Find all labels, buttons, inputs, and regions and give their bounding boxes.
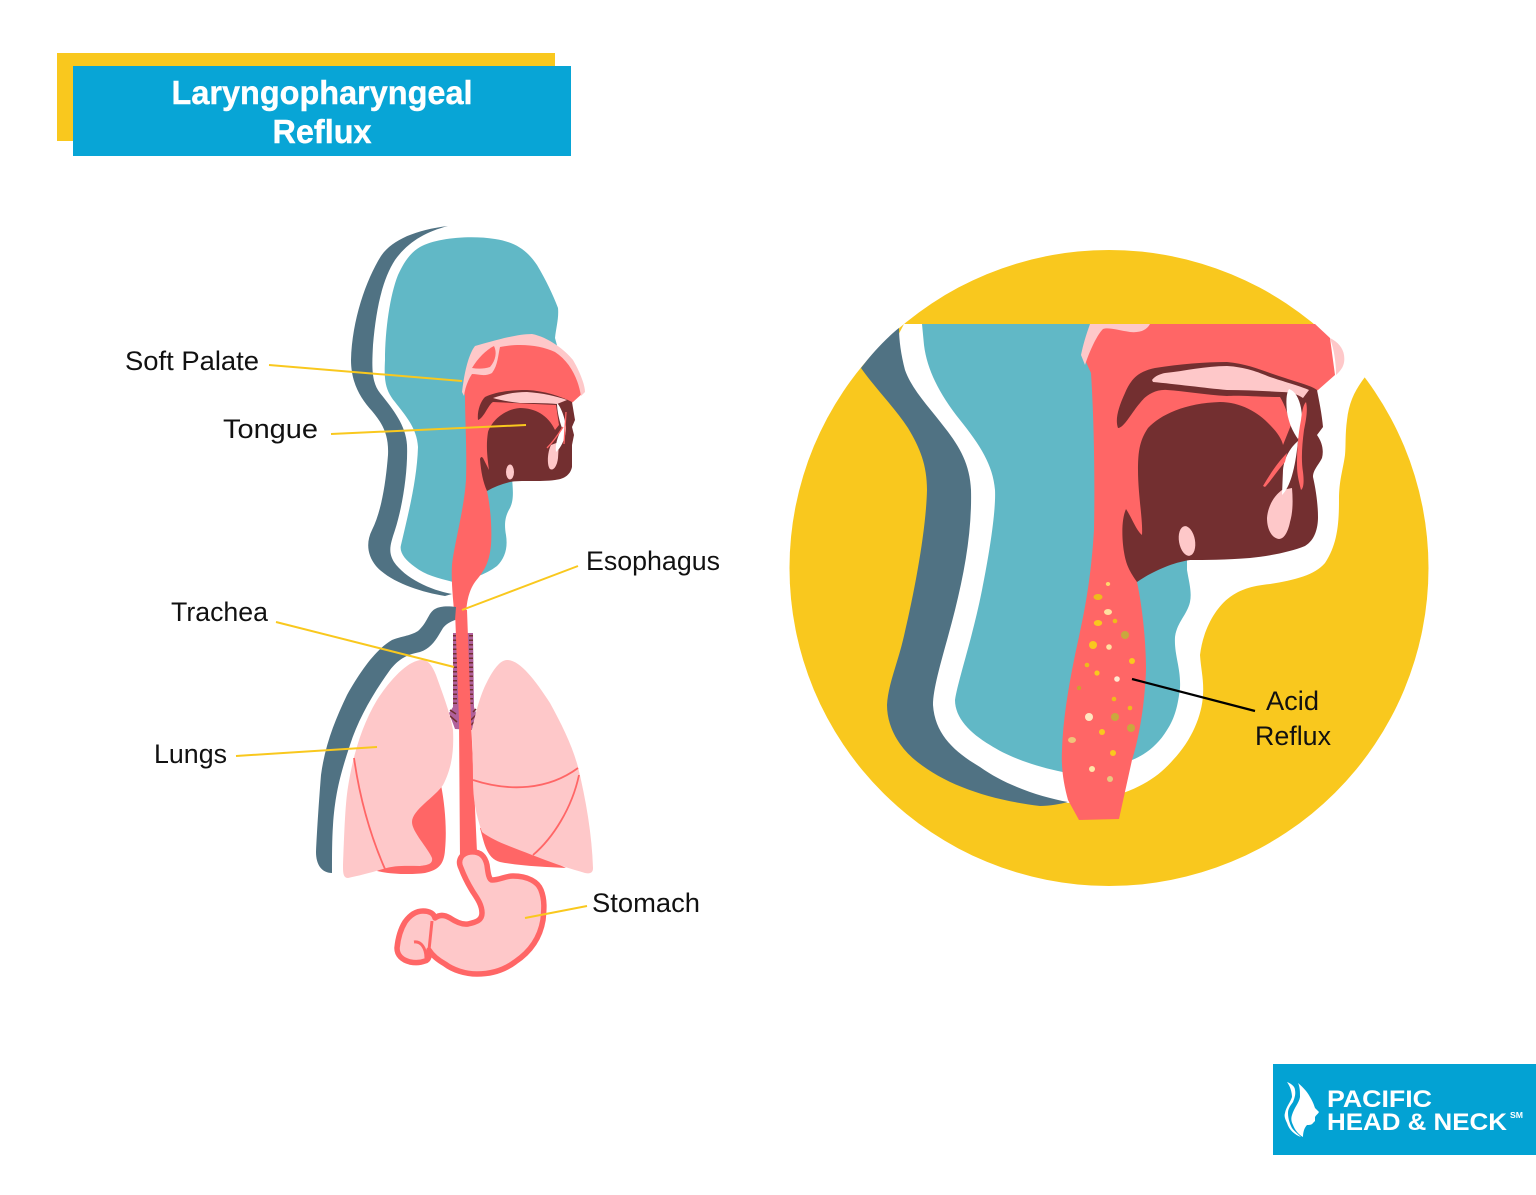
mouth dark [478, 390, 575, 491]
label: Esophagus: Esophagus [586, 546, 720, 576]
white teeth lower [1282, 441, 1298, 495]
red head and esophagus [1062, 324, 1335, 820]
shoulder shadow [316, 606, 456, 873]
pink nasal edge left [1081, 324, 1150, 365]
logo: SM [1510, 1111, 1523, 1120]
magnified circle view [790, 250, 1428, 886]
anatomy diagram: full body view [236, 226, 593, 974]
logo [1273, 1064, 1536, 1155]
shadow band [861, 324, 1068, 806]
palate pink [1152, 366, 1309, 398]
mouth white [556, 403, 566, 452]
title banner: Laryngopharyngeal [172, 74, 472, 111]
yellow circle [790, 250, 1428, 886]
label: Acid Reflux [1255, 686, 1331, 751]
label: Acid Reflux: Acid [1266, 686, 1319, 716]
uvula pink drop [1267, 488, 1293, 539]
leader lines [236, 365, 587, 918]
right lung red lower [480, 826, 566, 868]
head teal [385, 237, 572, 582]
left lung body [343, 660, 453, 878]
mouth pink oval and drop [506, 442, 559, 480]
pink nose edge right [1330, 338, 1344, 375]
acid leader line [1132, 679, 1255, 711]
trachea [449, 633, 476, 730]
white teeth upper [1286, 389, 1302, 439]
acid reflux dots [1068, 582, 1135, 782]
label: Trachea: Trachea [171, 597, 269, 627]
right lung [472, 660, 593, 873]
label: Lungs: Lungs [154, 739, 227, 769]
head back shadow [351, 226, 452, 596]
label: Soft Palate: Soft Palate [125, 346, 259, 376]
teal neck [922, 324, 1191, 773]
label: Stomach: Stomach [592, 888, 700, 918]
pink oval [1177, 525, 1197, 557]
logo: HEAD & NECK [1327, 1109, 1508, 1136]
stomach [397, 852, 544, 974]
left lung red lower [377, 785, 446, 874]
right lung body [472, 660, 593, 873]
right lung fissures [473, 768, 579, 855]
left lung fissure [354, 758, 385, 869]
palate pink [493, 392, 567, 404]
head pink edge [462, 334, 585, 396]
title banner: Reflux [272, 113, 372, 150]
stomach inner fold [414, 921, 432, 958]
label: Acid Reflux: Reflux [1255, 721, 1331, 751]
left lung [343, 660, 453, 878]
nasal hollow [472, 346, 496, 369]
title banner [57, 53, 571, 156]
label: Tongue: Tongue [223, 414, 318, 444]
head red cavity and esophagus [452, 335, 584, 620]
icon: face profile [1285, 1082, 1319, 1137]
red connector small [547, 412, 566, 448]
logo: PACIFIC [1327, 1086, 1432, 1113]
red thin connectors [1263, 402, 1307, 490]
mouth dark [1117, 362, 1323, 582]
white head halo [880, 324, 1380, 803]
esophagus tube [455, 610, 477, 858]
